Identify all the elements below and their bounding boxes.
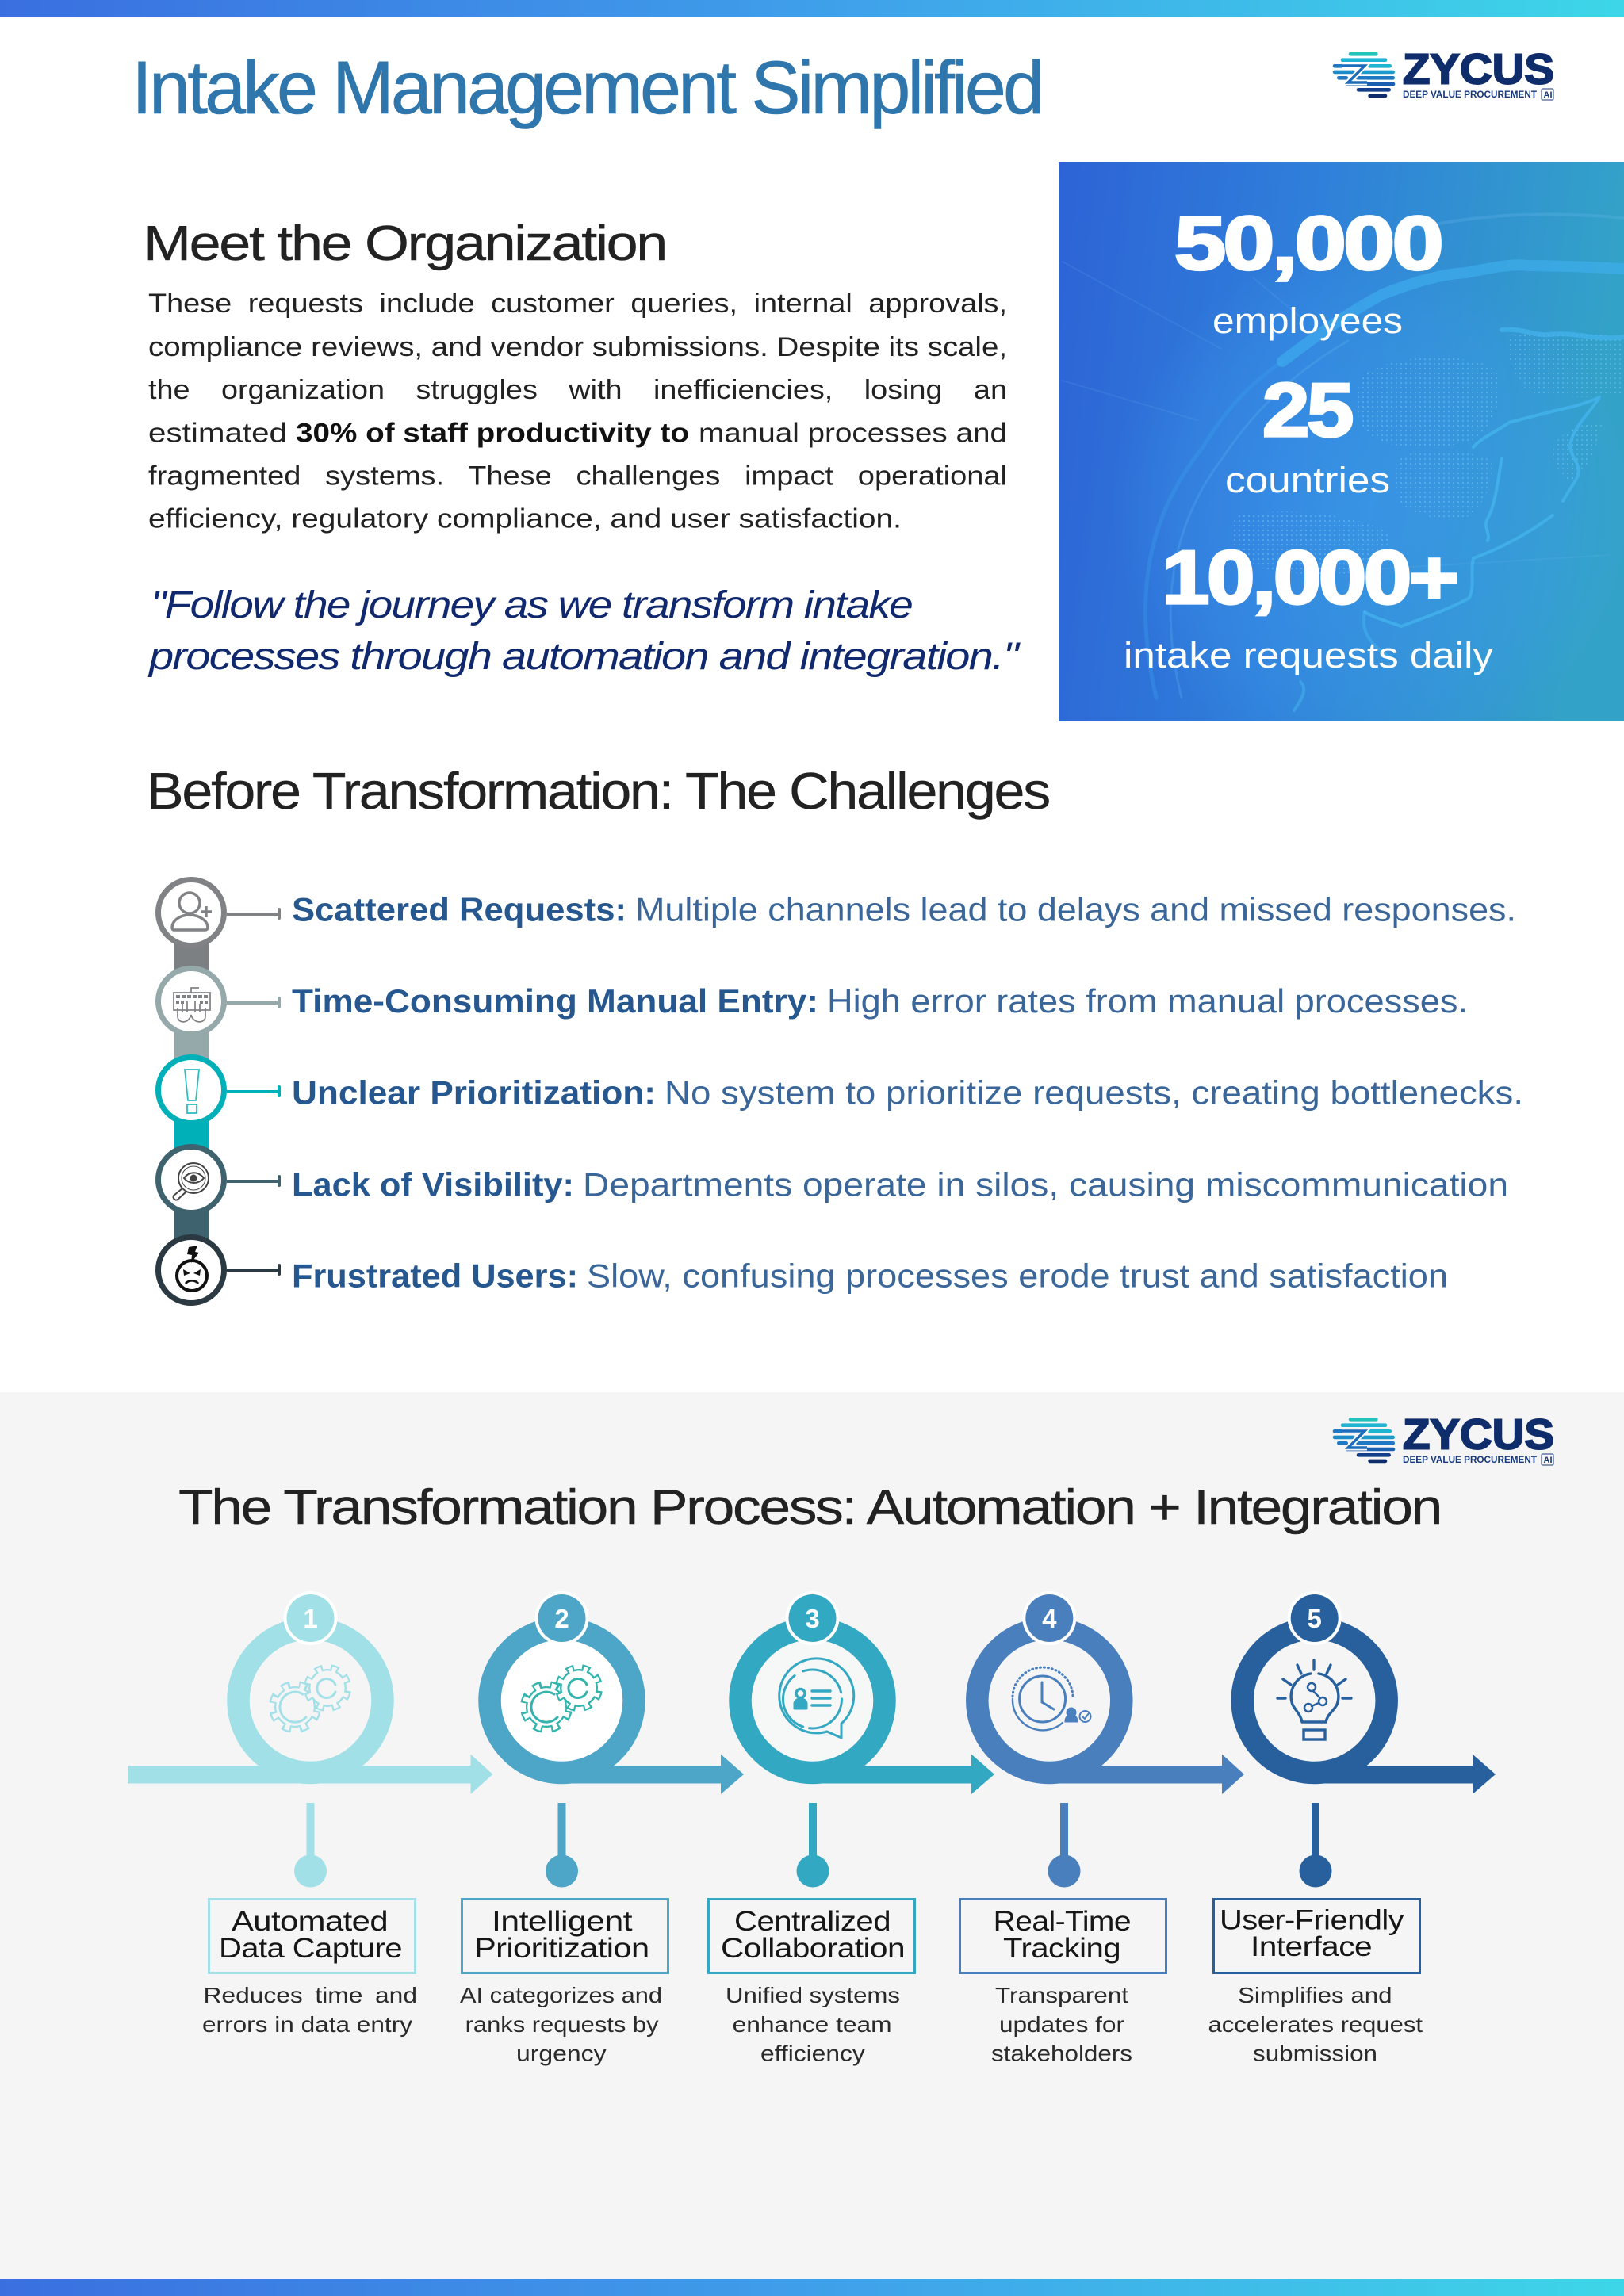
badge 3: 3	[805, 1604, 820, 1633]
description 4: stakeholders	[991, 2042, 1132, 2066]
label box 2	[462, 1900, 668, 1973]
title: Intake Management Simplified	[132, 46, 1041, 130]
arrow and ring 4	[977, 1628, 1244, 1794]
icon: gears	[268, 1663, 352, 1734]
connector bars	[174, 936, 209, 1253]
stem 2	[546, 1803, 578, 1887]
challenge: unclear prioritization	[159, 1058, 1523, 1123]
badge 5: 5	[1308, 1604, 1322, 1633]
challenge: manual entry	[159, 969, 1468, 1034]
arrow and ring 3	[741, 1628, 994, 1794]
step 1: automated data capture	[128, 1591, 493, 2037]
arrow and ring 5	[1243, 1628, 1496, 1794]
description 4: updates for	[999, 2012, 1124, 2037]
heading: transformation process: The Transformation Process: Automation + Integration	[178, 1480, 1441, 1535]
challenge: lack of visibility: Lack of Visibility:	[292, 1165, 574, 1203]
label box 5	[1213, 1900, 1419, 1973]
challenge: unclear prioritization: Unclear Prioritization:	[292, 1073, 656, 1112]
description 5: Simplifies and	[1238, 1983, 1392, 2007]
badge 1: 1	[303, 1604, 318, 1633]
heading: meet the organization: Meet the Organization	[144, 216, 666, 271]
badge 4: 4	[1042, 1604, 1057, 1633]
text block: organization description: the organization struggles with inefficiencies, losing an	[148, 375, 1007, 405]
label box 1: Data Capture	[219, 1933, 402, 1964]
logo: Zycus header: ZYCUS	[1403, 46, 1554, 94]
text block: organization description: These requests include customer queries, internal approvals,	[148, 289, 1007, 319]
label box 3	[709, 1900, 915, 1973]
badge 3	[785, 1591, 839, 1645]
description 2: ranks requests by	[465, 2012, 659, 2037]
badge 1	[284, 1591, 338, 1645]
description 5: accelerates request	[1208, 2012, 1423, 2037]
badge 5	[1288, 1591, 1342, 1645]
description 3	[726, 1983, 900, 2066]
text block: organization description	[148, 289, 1007, 534]
stat: employees	[1174, 201, 1441, 341]
label box 5: User-Friendly	[1220, 1904, 1404, 1936]
challenge: manual entry: Time-Consuming Manual Entry:	[292, 982, 818, 1020]
challenge: lack of visibility: Departments operate in silos, causing miscommunication	[583, 1165, 1508, 1203]
logo: Zycus header: DEEP VALUE PROCUREMENT	[1403, 90, 1537, 100]
arrow and ring 1	[128, 1628, 493, 1794]
challenge: scattered requests: Multiple channels lead to delays and missed responses.	[635, 891, 1516, 928]
stem 3	[796, 1803, 829, 1887]
logo: Zycus header	[1333, 46, 1554, 100]
quote: "Follow the journey as we transform intake	[151, 584, 912, 626]
stat: intake requests: intake requests daily	[1124, 635, 1494, 675]
challenge: manual entry: High error rates from manual processes.	[827, 982, 1468, 1020]
challenge: frustrated users: Slow, confusing processes erode trust and satisfaction	[587, 1257, 1448, 1294]
stat: employees: employees	[1212, 300, 1403, 341]
description 3: enhance team	[733, 2012, 892, 2037]
panel: challenges list	[159, 880, 1523, 1303]
challenge: frustrated users: Frustrated Users:	[292, 1257, 578, 1294]
icon: gears	[519, 1663, 603, 1734]
step 3: centralized collaboration	[709, 1591, 994, 2066]
icon: light bulb	[1277, 1660, 1351, 1739]
challenge: frustrated users	[159, 1237, 1448, 1303]
stat: employees: 50,000	[1174, 201, 1441, 285]
challenge: scattered requests: Scattered Requests:	[292, 891, 626, 928]
text block: organization description: fragmented systems. These challenges impact operational	[148, 461, 1007, 492]
description 5: submission	[1253, 2042, 1377, 2066]
label box 4: Real-Time	[994, 1906, 1131, 1937]
text block: organization description: compliance reviews, and vendor submissions. Despite its scale,	[148, 332, 1007, 362]
quote	[147, 584, 1021, 678]
panel: key statistics	[1059, 162, 1624, 769]
stat: intake requests	[1124, 535, 1494, 675]
challenge: scattered requests	[159, 880, 1516, 945]
text block: organization description: 30% of staff productivity to	[296, 419, 689, 449]
text block: organization description: efficiency, regulatory compliance, and user satisfaction.	[148, 504, 902, 534]
stat: countries	[1225, 368, 1390, 500]
description 4: Transparent	[995, 1983, 1128, 2007]
challenge: unclear prioritization: No system to prioritize requests, creating bottlenecks.	[665, 1073, 1523, 1112]
label box 5: Interface	[1251, 1931, 1372, 1962]
badge 4	[1022, 1591, 1076, 1645]
stat: countries: countries	[1225, 460, 1390, 500]
panel: meet the organization	[144, 216, 1021, 678]
description 3: Unified systems	[726, 1983, 900, 2007]
stem 4	[1048, 1803, 1080, 1887]
arrow and ring 2	[490, 1628, 744, 1794]
description 2: urgency	[516, 2042, 607, 2066]
label box 2: Prioritization	[474, 1933, 649, 1964]
step 4: real-time tracking	[959, 1591, 1244, 2066]
text block: organization description: estimated	[148, 419, 287, 449]
heading: before transformation: Before Transformation: The Challenges	[147, 762, 1050, 820]
logo: Zycus lower: AI	[1543, 1456, 1553, 1465]
description 3: efficiency	[760, 2042, 865, 2066]
label box 4	[959, 1900, 1166, 1973]
description 1: errors in data entry	[202, 2012, 412, 2037]
description 1: Reduces time and	[203, 1983, 417, 2007]
label box 2: Intelligent	[492, 1906, 633, 1937]
world map background	[1063, 214, 1624, 769]
text block: organization description: manual processes and	[699, 419, 1007, 449]
description 2	[460, 1983, 662, 2066]
stat: intake requests: 10,000+	[1162, 535, 1457, 620]
label box 4: Tracking	[1003, 1933, 1120, 1964]
description 4	[991, 1983, 1132, 2066]
badge 2: 2	[554, 1604, 569, 1633]
logo: Zycus lower	[1333, 1411, 1554, 1465]
stem 5	[1299, 1803, 1332, 1887]
label box 3: Centralized	[734, 1906, 891, 1937]
badge 2	[534, 1591, 588, 1645]
panel: transformation process background	[0, 1392, 1624, 2279]
challenge: lack of visibility	[159, 1146, 1508, 1213]
logo: Zycus lower: DEEP VALUE PROCUREMENT	[1403, 1456, 1537, 1465]
bottom gradient bar	[0, 2279, 1624, 2296]
description 2: AI categorizes and	[460, 1983, 662, 2007]
stat: countries: 25	[1262, 368, 1352, 453]
step 2: intelligent prioritization	[460, 1591, 744, 2066]
quote: processes through automation and integration."	[147, 636, 1021, 678]
description 1	[202, 1983, 417, 2037]
step 5: user-friendly interface	[1208, 1591, 1496, 2066]
description 5	[1208, 1983, 1423, 2066]
label box 1	[209, 1900, 416, 1973]
label box 3: Collaboration	[721, 1933, 905, 1964]
logo: Zycus lower: ZYCUS	[1403, 1411, 1554, 1459]
label box 1: Automated	[232, 1906, 388, 1937]
logo: Zycus header: AI	[1543, 90, 1553, 100]
icon: clock tracking	[1013, 1667, 1091, 1730]
icon: chat profile	[779, 1659, 854, 1738]
top gradient bar	[0, 0, 1624, 17]
stem 1	[294, 1803, 327, 1887]
